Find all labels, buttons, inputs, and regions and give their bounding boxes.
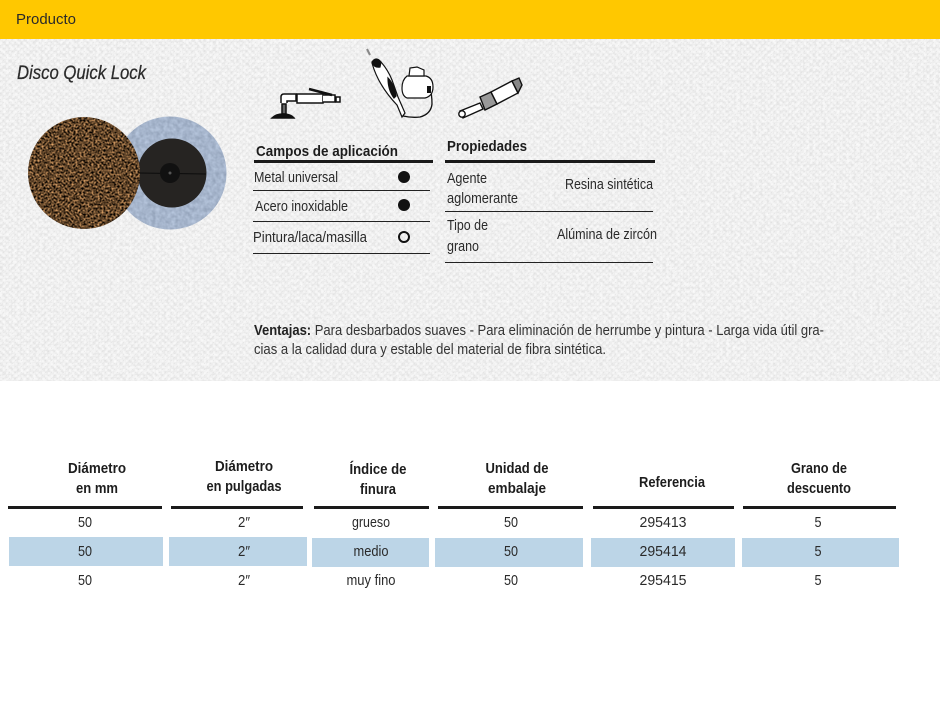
column: referencia: Referencia [639,474,706,491]
column: grano de descuento: Grano de [791,460,847,477]
column: unidad de embalaje: 50 [504,514,518,531]
column: grano de descuento: 5 [814,543,822,560]
column: diámetro en mm: Diámetro [68,460,126,477]
panel: campos de aplicación: Acero inoxidable [255,198,348,215]
table highlight row [9,537,899,567]
column: unidad de embalaje: 50 [504,572,518,589]
column: referencia: 295414 [640,543,686,560]
column: diámetro en pulgadas: 2″ [238,572,251,589]
column: unidad de embalaje [438,460,583,589]
table: product references [8,458,899,589]
column: grano de descuento: descuento [787,480,851,497]
column: diámetro en mm: 50 [78,514,92,531]
panel: propiedades: Tipo de [447,217,488,234]
heading: campos de aplicación: Campos de aplicación [256,143,398,160]
product title: Disco Quick Lock [17,63,147,84]
column: diámetro en pulgadas: 2″ [238,514,251,531]
column: índice de finura: muy fino [346,572,396,589]
panel: campos de aplicación: Metal universal [254,169,338,186]
header bar: Producto [16,11,76,28]
column: diámetro en mm: 50 [78,572,92,589]
panel: propiedades: aglomerante [447,190,518,207]
column: índice de finura: grueso [352,514,390,531]
panel: product background [0,39,940,381]
column: diámetro en pulgadas [171,458,303,589]
icon: rotary tool with motor [367,49,433,117]
column: unidad de embalaje: embalaje [488,480,546,497]
column: unidad de embalaje: Unidad de [486,460,548,477]
text block: ventajas: cias a la calidad dura y estable del material de fibra sintética. [254,341,606,358]
panel: propiedades: Agente [447,170,487,187]
column: diámetro en mm: en mm [76,480,118,497]
text block: ventajas: Ventajas: Para desbarbados suaves - Para eliminación de herrumbe y pintura - Larga vida útil gra- [254,322,824,339]
heading: propiedades: Propiedades [447,138,527,155]
panel: propiedades: grano [447,238,479,255]
panel: campos de aplicación [253,143,433,254]
column: índice de finura [314,461,429,589]
column: índice de finura: Índice de [350,461,406,478]
product photo: discs [28,116,226,230]
column: índice de finura: finura [360,481,397,498]
column: diámetro en pulgadas: en pulgadas [206,478,282,495]
panel: propiedades [445,138,657,263]
icon: straight grinder [459,78,522,118]
column: grano de descuento: 5 [814,572,822,589]
column: diámetro en mm [8,460,162,589]
column: referencia: 295415 [640,572,686,589]
column: diámetro en pulgadas: Diámetro [215,458,273,475]
column: unidad de embalaje: 50 [504,543,518,560]
panel: propiedades: Alúmina de zircón [557,226,657,243]
column: diámetro en mm: 50 [78,543,92,560]
icon: angle grinder [272,89,340,118]
panel: campos de aplicación: Pintura/laca/masilla [253,229,368,246]
header bar [0,0,940,39]
column: grano de descuento: 5 [814,514,822,531]
panel: propiedades: Resina sintética [565,176,654,193]
column: grano de descuento [743,460,896,589]
text block: ventajas [254,322,824,358]
column: índice de finura: medio [354,543,388,560]
column: referencia: 295413 [640,514,686,531]
column: diámetro en pulgadas: 2″ [238,543,251,560]
column: referencia [593,474,734,589]
